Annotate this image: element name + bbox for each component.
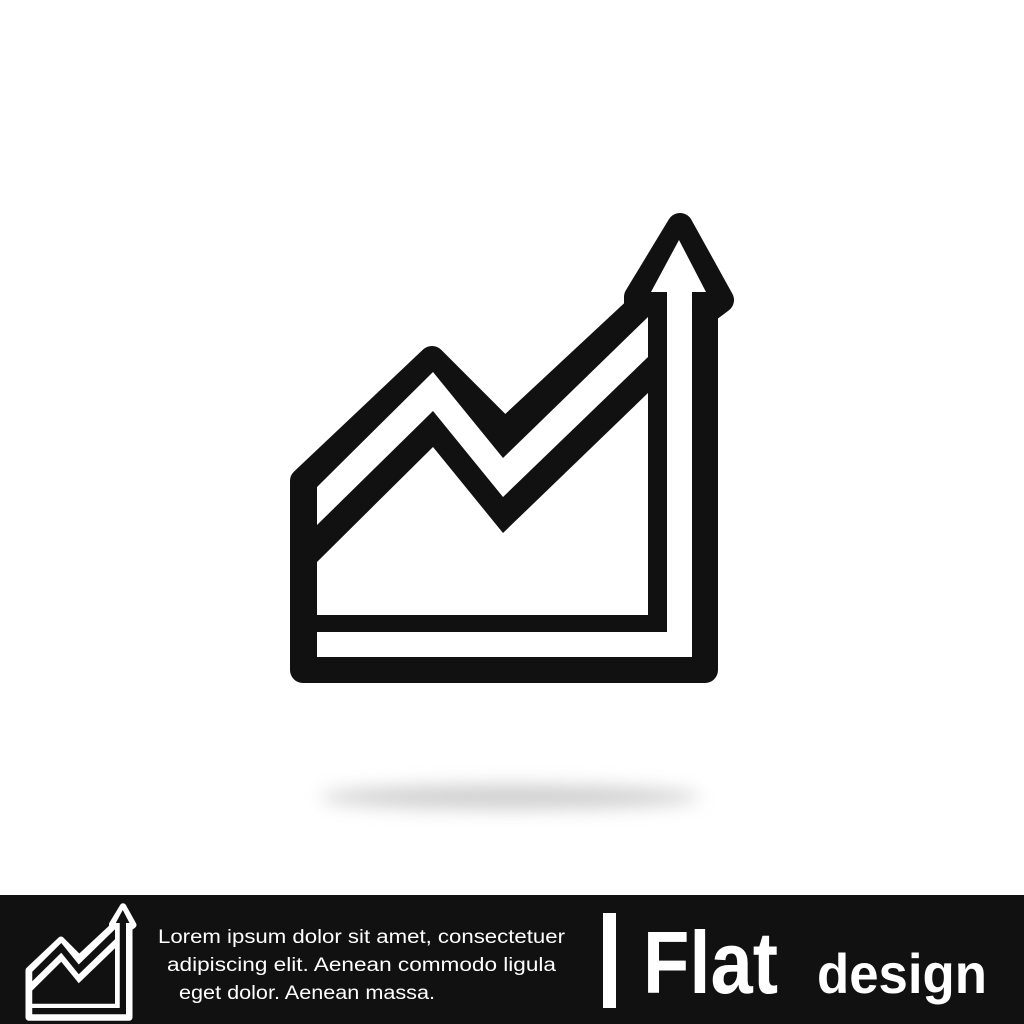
bottom bar	[0, 895, 1024, 1024]
shadow under icon	[320, 785, 700, 809]
text block: lorem ipsum: eget dolor. Aenean massa.	[179, 983, 435, 1004]
icon: growth chart with arrow	[303, 226, 721, 670]
text block: lorem ipsum: adipiscing elit. Aenean commodo ligula	[167, 955, 556, 976]
heading: Flat design: Flat	[643, 913, 778, 1012]
vertical divider bar	[603, 913, 616, 1008]
icon: small chart	[29, 906, 133, 1018]
text block: lorem ipsum	[158, 927, 566, 1004]
text block: lorem ipsum: Lorem ipsum dolor sit amet, consectetuer	[158, 927, 566, 948]
heading: Flat design	[643, 913, 987, 1012]
heading: Flat design: design	[817, 942, 987, 1005]
